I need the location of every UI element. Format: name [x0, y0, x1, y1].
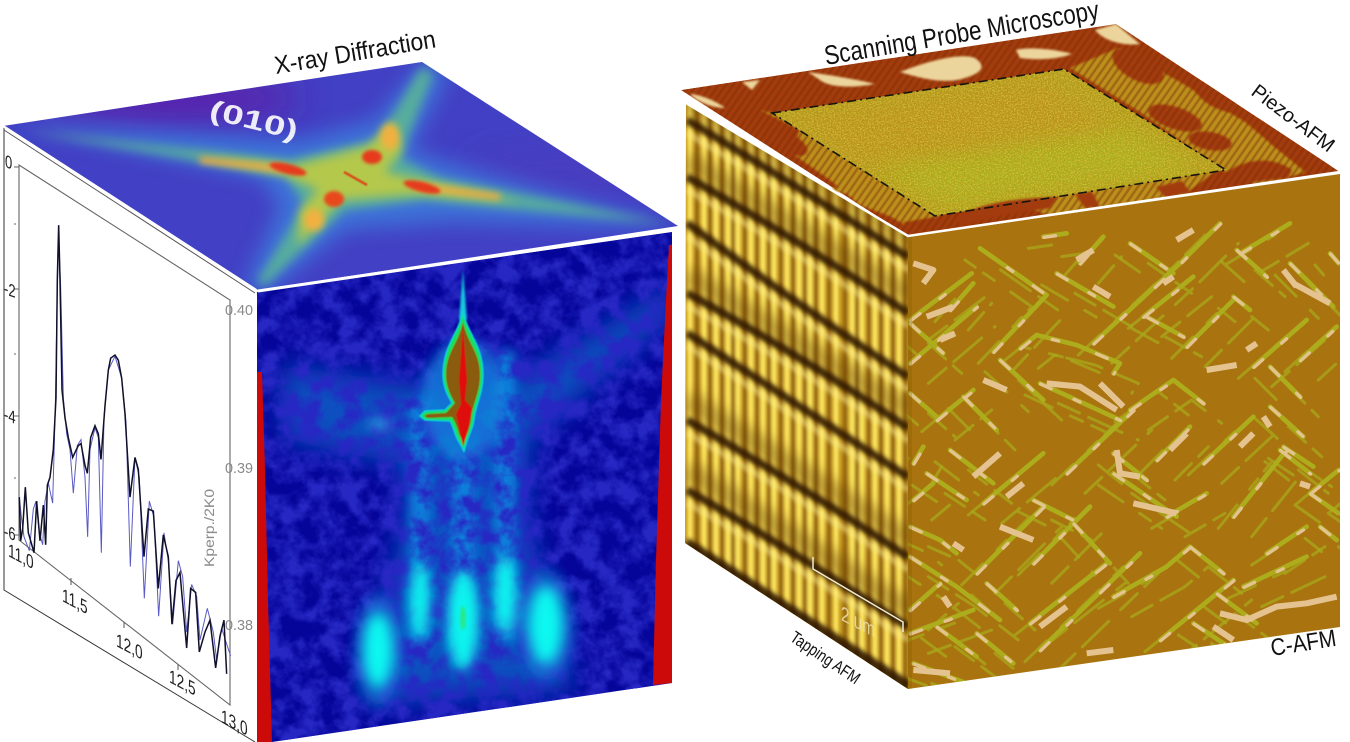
scanned region	[765, 65, 1235, 220]
tan deposits	[913, 230, 1337, 673]
panel: reciprocal space map on top face	[0, 55, 690, 296]
panel: diffraction plot on left face	[3, 126, 256, 742]
edge highlights	[686, 103, 1340, 236]
x axis labels: 12,5	[169, 664, 196, 700]
right axis labels: 0.40	[225, 302, 253, 319]
hatch	[681, 24, 1340, 236]
cream patches	[690, 24, 1140, 108]
dark terrace bands	[685, 120, 908, 688]
x axis labels: 11,5	[62, 583, 88, 619]
y axis labels: 0	[5, 152, 12, 174]
broad shaded terraces	[687, 100, 908, 610]
y axis labels: -2	[4, 279, 16, 303]
crack network	[895, 223, 1350, 703]
cube: X-ray Diffraction	[0, 55, 690, 742]
simulated curve	[19, 239, 231, 660]
axis title: Kperp./2K0	[201, 489, 217, 567]
olive surroundings	[760, 48, 1305, 225]
y axis labels: -4	[4, 405, 16, 429]
edge highlight	[258, 230, 672, 291]
panel: Piezo-AFM top face	[681, 24, 1340, 236]
right axis labels	[225, 302, 253, 634]
panel: C-AFM right face	[895, 170, 1350, 703]
dashed region outline	[772, 69, 1226, 216]
scale label: 2 um: 2 um	[841, 601, 875, 642]
label: (010): (010)	[207, 95, 301, 146]
panel: Tapping AFM left face	[680, 100, 915, 700]
face edges	[3, 126, 256, 742]
right axis labels: 0.38	[225, 617, 253, 634]
plot frame and ticks	[14, 165, 230, 705]
x axis labels: 13,0	[221, 704, 248, 740]
bright terrace edges	[687, 133, 908, 640]
y axis labels	[4, 152, 16, 546]
right axis labels: 0.39	[225, 460, 253, 477]
x axis labels: 11,0	[8, 538, 34, 574]
x axis labels	[8, 538, 248, 740]
dark patches	[790, 48, 1332, 183]
cube: Scanning Probe Microscopy	[680, 24, 1350, 703]
red side strips	[257, 245, 672, 742]
measured curve	[19, 225, 227, 674]
dark patches over region edge	[955, 181, 1190, 226]
label: Tapping AFM: Tapping AFM	[787, 628, 864, 688]
heading: X-ray Diffraction: X-ray Diffraction	[272, 25, 438, 80]
scale bar	[813, 557, 903, 632]
label: C-AFM: C-AFM	[1269, 625, 1338, 662]
diffraction peak	[420, 312, 483, 452]
panel: reciprocal space map on front face	[250, 225, 680, 742]
label: Piezo-AFM: Piezo-AFM	[1247, 80, 1338, 157]
y axis labels: -6	[4, 522, 16, 546]
x axis labels: 12,0	[116, 628, 143, 664]
